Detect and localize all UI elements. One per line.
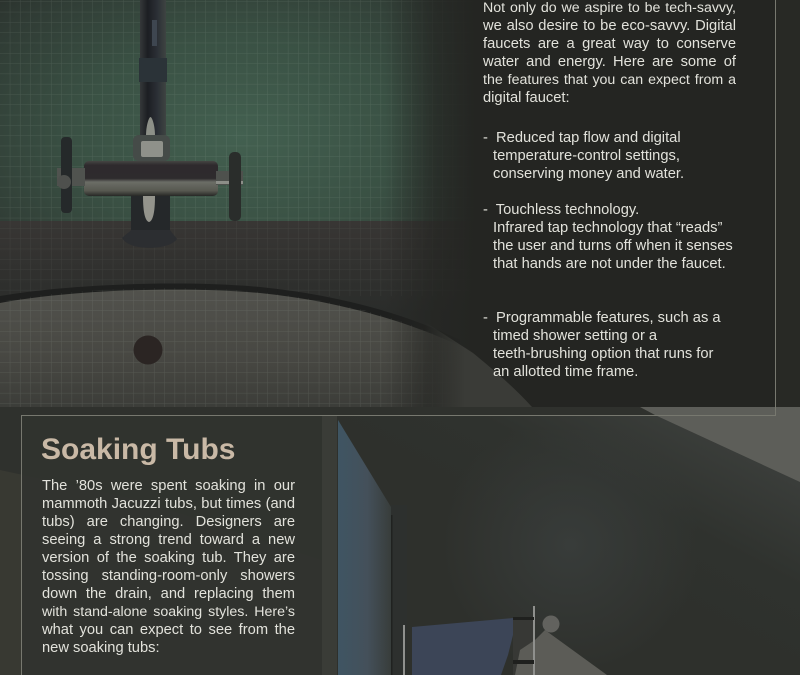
text block: touchless technology <box>483 202 733 272</box>
text block: reduced tap flow: temperature-control settings, <box>493 148 680 164</box>
text block: digital faucet intro: water and energy. Here are some of <box>483 54 736 70</box>
photo: faucet and basin <box>0 0 451 407</box>
text block: touchless technology: that hands are not under the faucet. <box>493 256 726 272</box>
text block: digital faucet intro: faucets are a great way to conserve <box>483 36 736 52</box>
icon: drain <box>134 336 162 364</box>
text block: digital faucet intro: we also desire to be eco-savvy. Digital <box>483 18 736 34</box>
text block: digital faucet intro <box>483 0 736 106</box>
text block: programmable features: an allotted time frame. <box>493 364 638 380</box>
text block: soaking tubs intro: mammoth Jacuzzi tubs, but times (and <box>42 496 295 512</box>
text block: programmable features: timed shower setting or a <box>493 328 657 344</box>
text block: touchless technology: the user and turns off when it senses <box>493 238 733 254</box>
photo: bathroom with tub <box>0 407 800 675</box>
text block: soaking tubs intro: with stand-alone soaking styles. Here’s <box>42 604 295 620</box>
text block: soaking tubs intro <box>42 478 295 656</box>
panel: digital faucet background <box>385 0 800 407</box>
text block: soaking tubs intro: new soaking tubs: <box>42 640 160 656</box>
text block: soaking tubs intro: tossing standing-room-only showers <box>42 568 295 584</box>
text block: soaking tubs intro: seeing a strong trend toward a new <box>42 532 295 548</box>
text block: soaking tubs intro: down the drain, and replacing them <box>42 586 295 602</box>
panel: soaking tubs background <box>22 416 322 675</box>
text block: programmable features <box>483 310 721 380</box>
text block: soaking tubs intro: tubs) are changing. Designers are <box>42 514 295 530</box>
text block: reduced tap flow: - Reduced tap flow and digital <box>483 130 681 146</box>
text block: touchless technology: - Touchless technology. <box>483 202 639 218</box>
text block: programmable features: - Programmable features, such as a <box>483 310 721 326</box>
heading: Soaking Tubs: Soaking Tubs <box>41 433 235 466</box>
text block: digital faucet intro: the features that you can expect from a <box>483 72 736 88</box>
text block: soaking tubs intro: what you can expect to see from the <box>42 622 295 638</box>
text block: digital faucet intro: Not only do we aspire to be tech-savvy, <box>483 0 736 16</box>
text block: digital faucet intro: digital faucet: <box>483 90 570 106</box>
text block: reduced tap flow: conserving money and water. <box>493 166 684 182</box>
text block: touchless technology: Infrared tap technology that “reads” <box>493 220 722 236</box>
text block: soaking tubs intro: The ’80s were spent soaking in our <box>42 478 295 494</box>
text block: reduced tap flow <box>483 130 684 182</box>
faucet <box>57 0 243 248</box>
text block: soaking tubs intro: version of the soaking tub. They are <box>42 550 295 566</box>
text block: programmable features: teeth-brushing option that runs for <box>493 346 713 362</box>
